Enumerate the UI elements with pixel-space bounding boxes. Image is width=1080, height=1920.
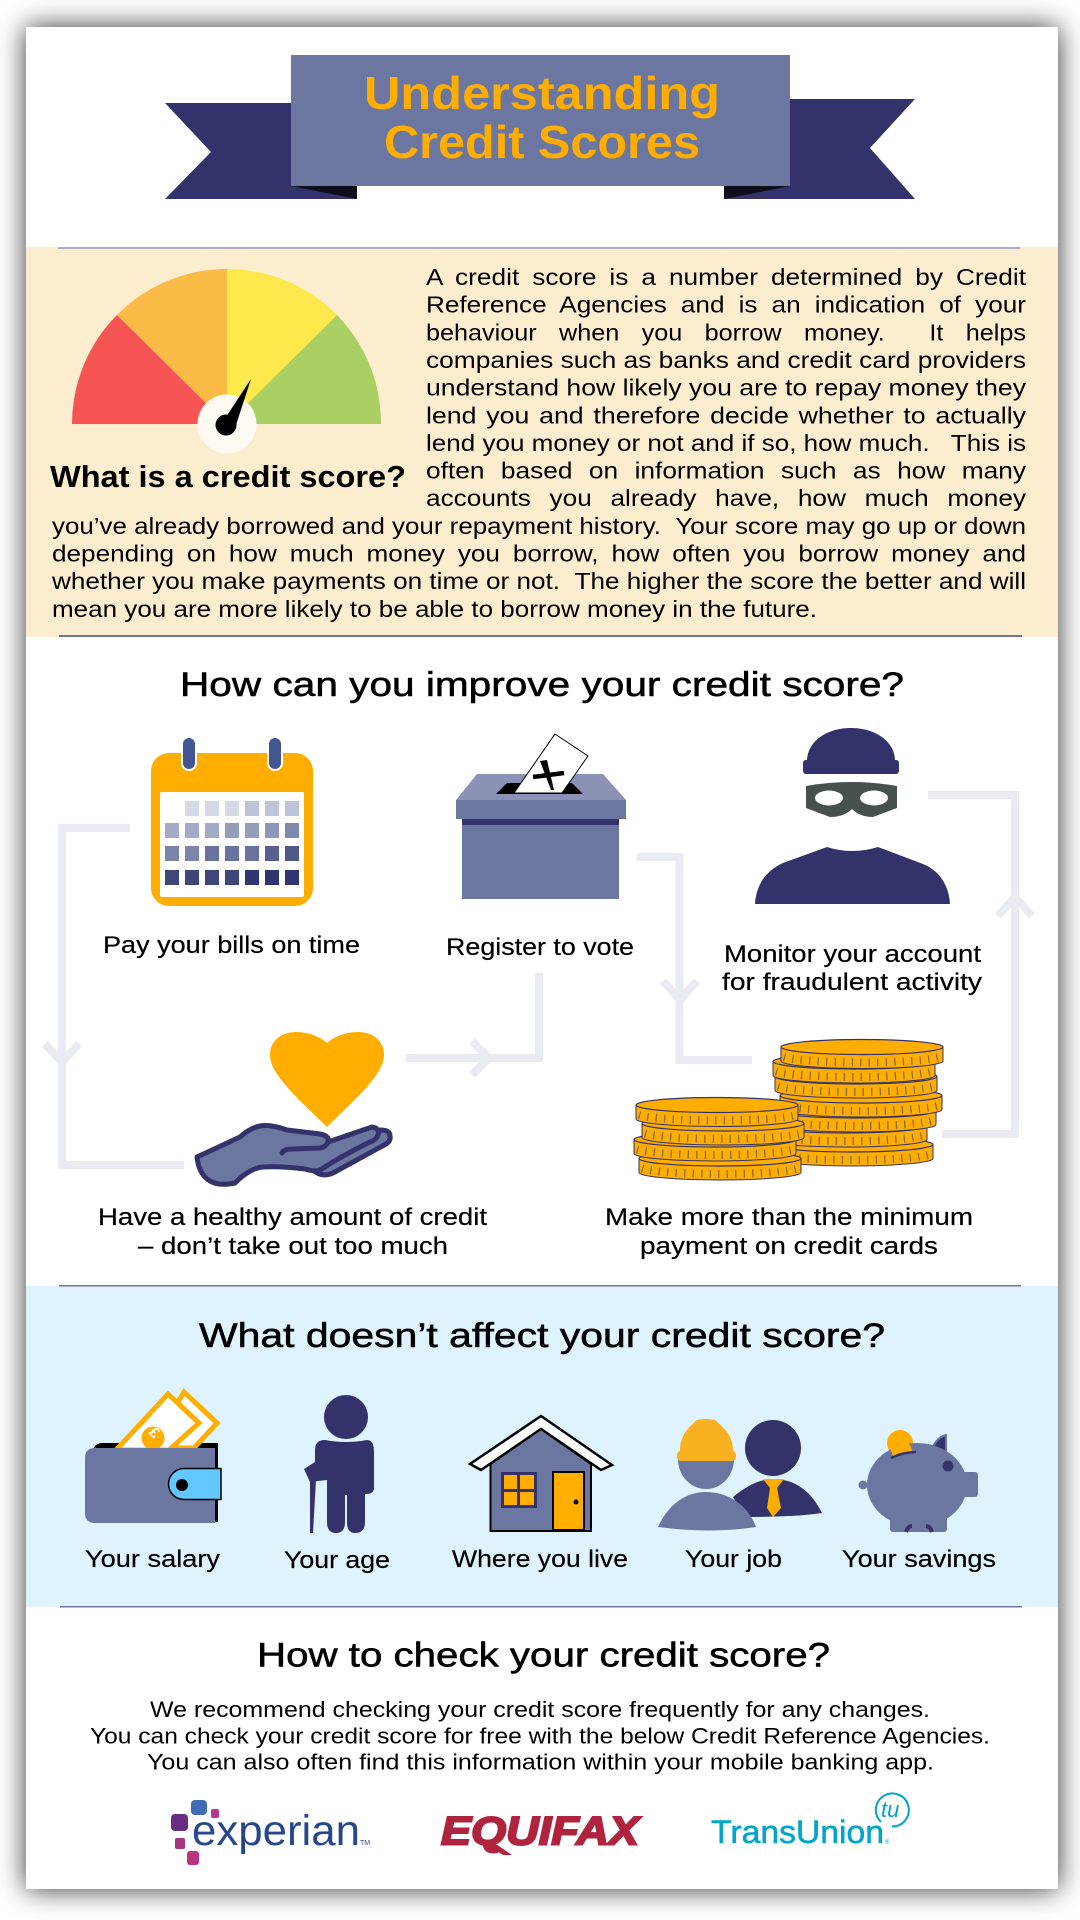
flow arrow: credit to vote xyxy=(406,973,539,1075)
title line 1: Understanding xyxy=(364,67,720,119)
body text: depending on how much money you borrow, how often you borrow money and xyxy=(52,540,1026,566)
body text: you’ve already borrowed and your repayment history. Your score may go up or down xyxy=(52,513,1026,539)
icon: thief xyxy=(755,728,950,904)
panel: how to check xyxy=(90,1636,990,1865)
flow arrow: vote to payments xyxy=(637,857,752,1060)
panel: what doesn't affect xyxy=(26,1285,1058,1608)
logo: transunion: ® xyxy=(885,1839,890,1846)
body text: lend you money or not and if so, how much. This is xyxy=(426,430,1026,456)
label: monitor: Monitor your account xyxy=(724,941,981,968)
panel: how can you improve xyxy=(45,666,1032,1260)
title banner xyxy=(165,55,915,199)
logo: equifax: EQUIFAX xyxy=(441,1810,642,1854)
logo: transunion: TransUnion xyxy=(711,1814,884,1850)
heading: improve: How can you improve your credit score? xyxy=(180,666,904,704)
gauge chart xyxy=(72,269,381,454)
body text: often based on information such as how many xyxy=(426,458,1027,484)
label: pay your bills: Pay your bills on time xyxy=(103,932,360,959)
paragraph: check advice: We recommend checking your credit score frequently for any changes. xyxy=(150,1697,930,1722)
icon: house xyxy=(470,1416,612,1531)
label: register to vote: Register to vote xyxy=(446,934,634,961)
logo: experian: TM xyxy=(360,1840,370,1847)
title line 2: Credit Scores xyxy=(384,116,700,168)
body text: Reference Agencies and is an indication of your xyxy=(426,292,1026,318)
label: age: Your age xyxy=(284,1547,390,1574)
icon: ballot box xyxy=(456,734,626,899)
icon: calendar xyxy=(151,737,313,906)
body text: A credit score is a number determined by Credit xyxy=(426,264,1027,290)
logo: experian: experian xyxy=(192,1807,360,1855)
body text: whether you make payments on time or not. The higher the score the better and will xyxy=(51,568,1026,594)
banner face xyxy=(291,55,790,186)
label: minimum payment: payment on credit cards xyxy=(640,1233,938,1260)
icon: wallet: £ xyxy=(145,1424,164,1442)
label: salary: Your salary xyxy=(85,1546,220,1573)
paragraph: check advice: You can also often find this information within your mobile banking app. xyxy=(147,1750,934,1774)
body text: accounts you already have, how much money xyxy=(426,485,1027,511)
banner right fold dark xyxy=(724,186,790,199)
label: healthy credit: – don’t take out too much xyxy=(138,1233,448,1260)
heading: what is a credit score: What is a credit score? xyxy=(50,459,406,494)
label: savings: Your savings xyxy=(842,1546,996,1573)
icon: heart in hand xyxy=(197,1032,390,1184)
banner right tail xyxy=(724,99,915,199)
label: monitor: for fraudulent activity xyxy=(722,969,982,996)
icon: wallet xyxy=(85,1392,221,1523)
panel: what is a credit score xyxy=(26,247,1058,637)
icon: coin stacks xyxy=(634,1040,943,1180)
body text: companies such as banks and credit card providers xyxy=(426,347,1026,373)
label: healthy credit xyxy=(98,1204,487,1260)
label: where you live: Where you live xyxy=(452,1546,628,1573)
label: job: Your job xyxy=(685,1546,782,1573)
heading: doesn't affect: What doesn’t affect your credit score? xyxy=(199,1317,885,1355)
body text: behaviour when you borrow money. It helps xyxy=(426,319,1026,345)
icon: piggy bank xyxy=(858,1430,978,1532)
heading: how to check: How to check your credit score? xyxy=(257,1636,830,1674)
logo: transunion: tu xyxy=(881,1797,899,1822)
icon: worker and businessman xyxy=(658,1419,822,1530)
label: minimum payment xyxy=(605,1204,973,1260)
logo: experian xyxy=(171,1800,370,1865)
label: healthy credit: Have a healthy amount of credit xyxy=(98,1204,487,1231)
banner left fold dark xyxy=(291,186,357,199)
body text: mean you are more likely to be able to borrow money in the future. xyxy=(52,596,817,622)
label: monitor xyxy=(722,941,982,996)
label: minimum payment: Make more than the minimum xyxy=(605,1204,973,1231)
icon: older person xyxy=(304,1395,374,1533)
banner left tail xyxy=(165,103,357,199)
paragraph: check advice xyxy=(90,1697,990,1774)
body text xyxy=(51,264,1027,622)
body text: understand how likely you are to repay money they xyxy=(426,375,1027,401)
body text: lend you and therefore decide whether to actually xyxy=(426,402,1027,428)
flow arrow: payments to monitor xyxy=(928,795,1032,1134)
logo: transunion xyxy=(711,1794,909,1850)
paragraph: check advice: You can check your credit score for free with the below Credit Reference Agencies. xyxy=(90,1724,990,1748)
flow arrow: bills to credit xyxy=(45,828,184,1165)
